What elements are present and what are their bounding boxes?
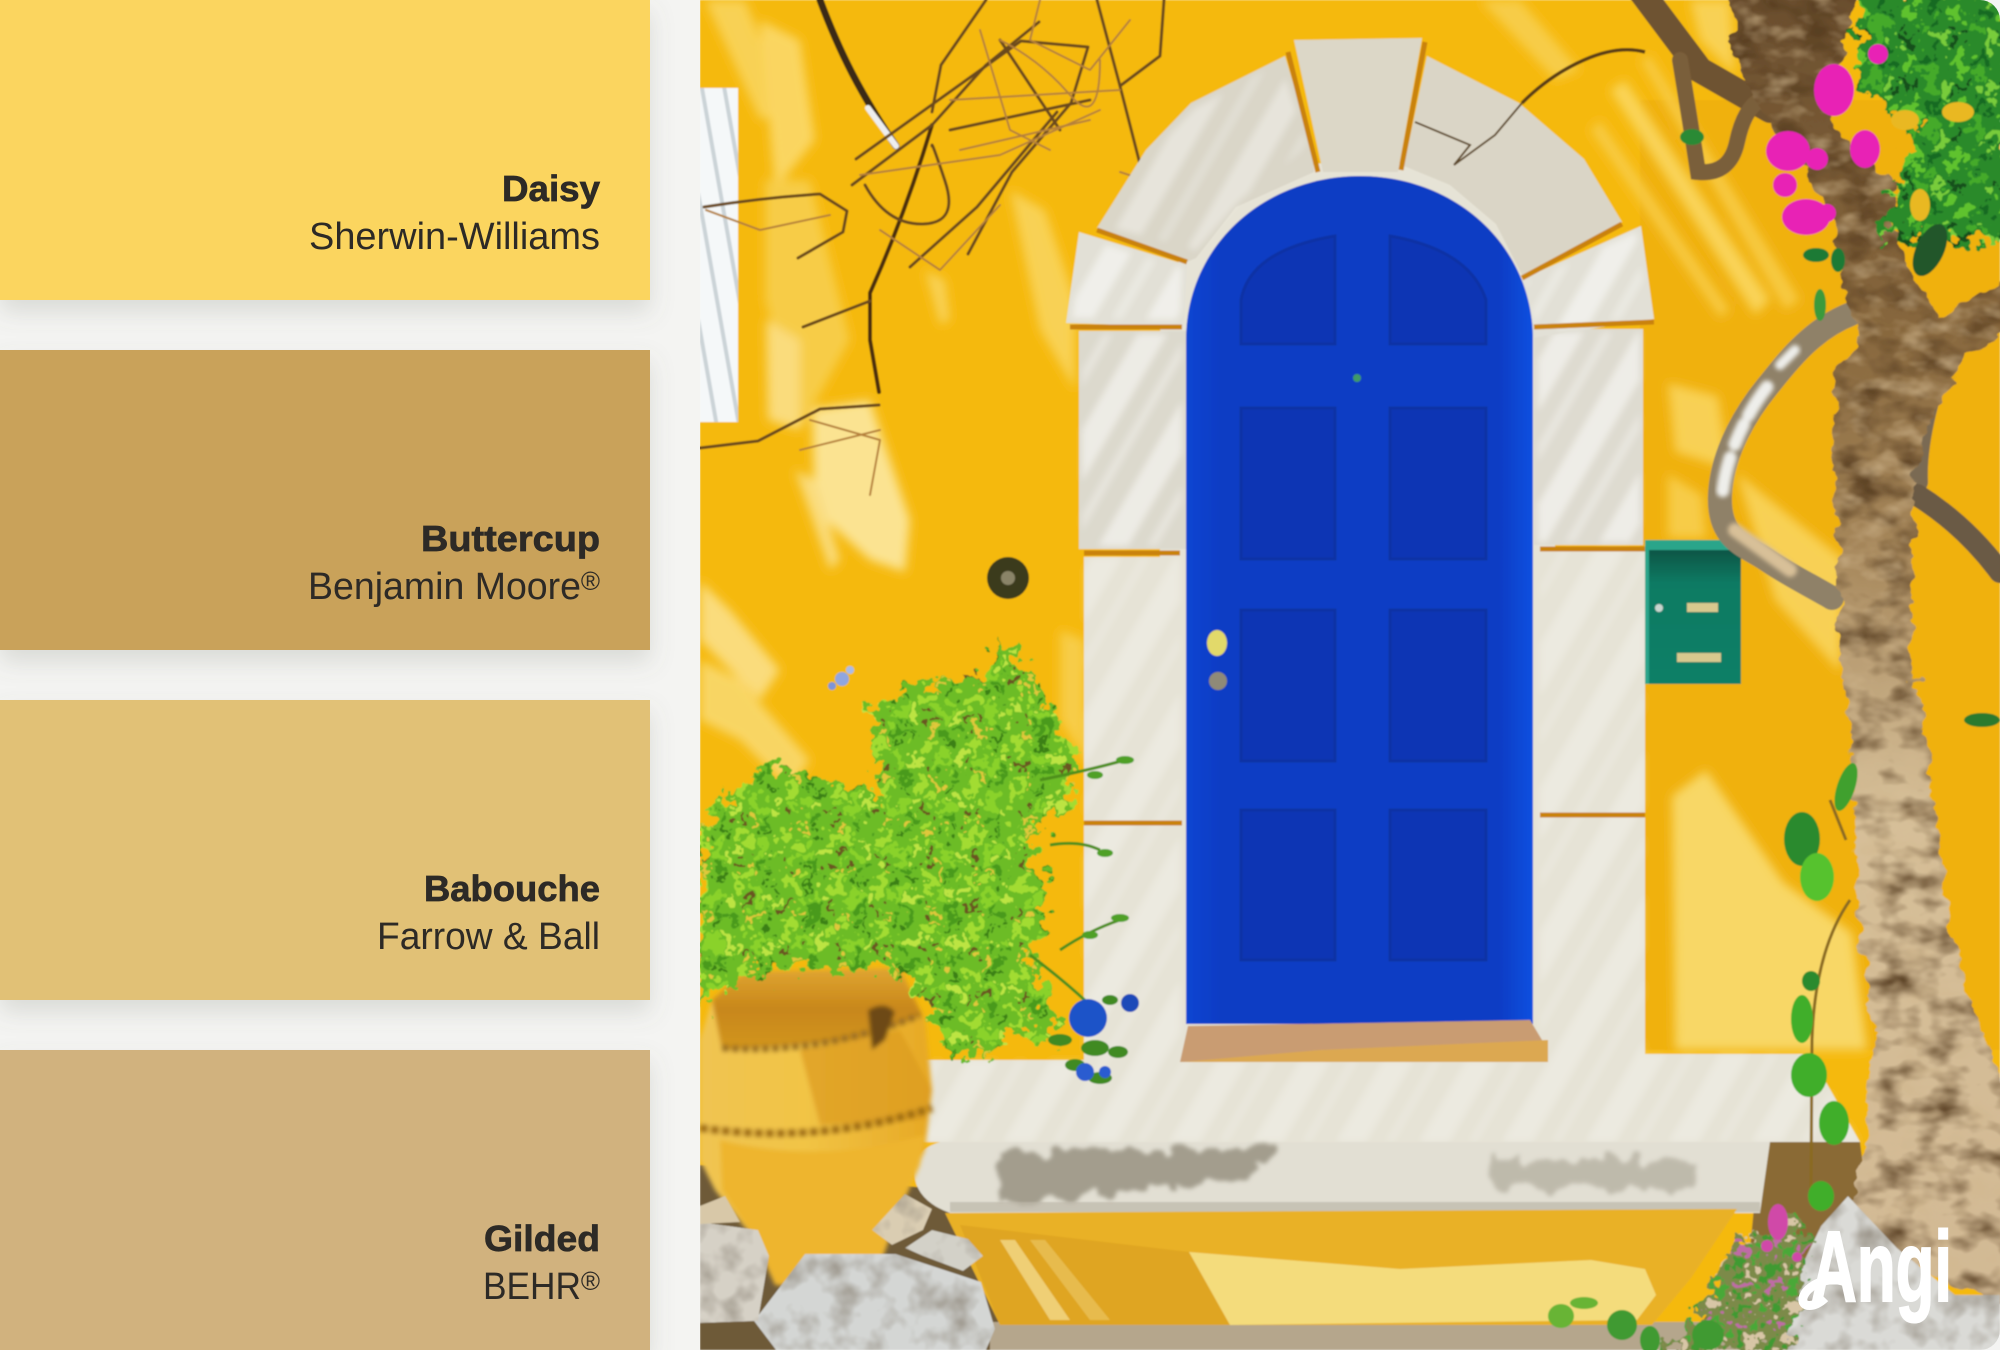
- swatch: Babouche: Babouche: [424, 868, 600, 909]
- white plinth and stone jambs: [923, 160, 1860, 1142]
- swatch: Daisy: Daisy: [502, 168, 600, 209]
- terracotta pot: [700, 968, 932, 1288]
- swatch: Babouche: Farrow & Ball: [377, 916, 600, 958]
- trunk: [1733, 0, 2000, 1310]
- blue flowers: [828, 666, 1139, 1084]
- climbing vine: [1784, 713, 2000, 1211]
- swatch: Buttercup: ®: [581, 566, 600, 596]
- thin branch: [1522, 50, 1645, 103]
- threshold: [1180, 1020, 1548, 1062]
- step riser: [945, 1209, 1737, 1325]
- branches: [1640, 0, 2000, 598]
- green plant: [700, 640, 1139, 1084]
- top right foliage: [1680, 0, 2000, 321]
- swatch: Gilded: [0, 1050, 650, 1350]
- photo: yellow house with blue door: [700, 0, 2000, 1350]
- swatch: Daisy: Sherwin-Williams: [309, 216, 600, 258]
- door knobs: [1207, 630, 1227, 656]
- stone arch: [1066, 38, 1654, 338]
- swatch: Buttercup: Buttercup: [421, 518, 600, 559]
- panel: colour swatches: [0, 0, 650, 1350]
- step slab: [914, 1142, 1770, 1213]
- wall disc: [987, 557, 1029, 599]
- wall: [700, 0, 2000, 1350]
- ground flowers and leaves: [1548, 1204, 1815, 1350]
- crack: [1415, 103, 1522, 165]
- door panels: [1241, 236, 1486, 960]
- mailbox: [1645, 540, 1741, 684]
- rocks: [700, 1194, 995, 1350]
- twigs: [700, 0, 1190, 495]
- swatch: Buttercup: [0, 350, 650, 650]
- tree: [1640, 0, 2000, 1310]
- swatch: Babouche: [0, 700, 650, 1000]
- swatch: Gilded: Gilded: [484, 1218, 600, 1259]
- swatch: Gilded: BEHR: [483, 1266, 581, 1308]
- magenta flowers: [1766, 44, 1888, 235]
- swatch: Gilded: ®: [581, 1266, 600, 1296]
- swatch: Buttercup: Benjamin Moore: [308, 566, 581, 608]
- bottom right rock: [1783, 1196, 2000, 1350]
- window frame: [700, 88, 738, 422]
- blue door: [1186, 176, 1533, 1024]
- stone joints: [1070, 42, 1654, 823]
- ground: [700, 1142, 2000, 1350]
- swatch: Daisy: [0, 0, 650, 300]
